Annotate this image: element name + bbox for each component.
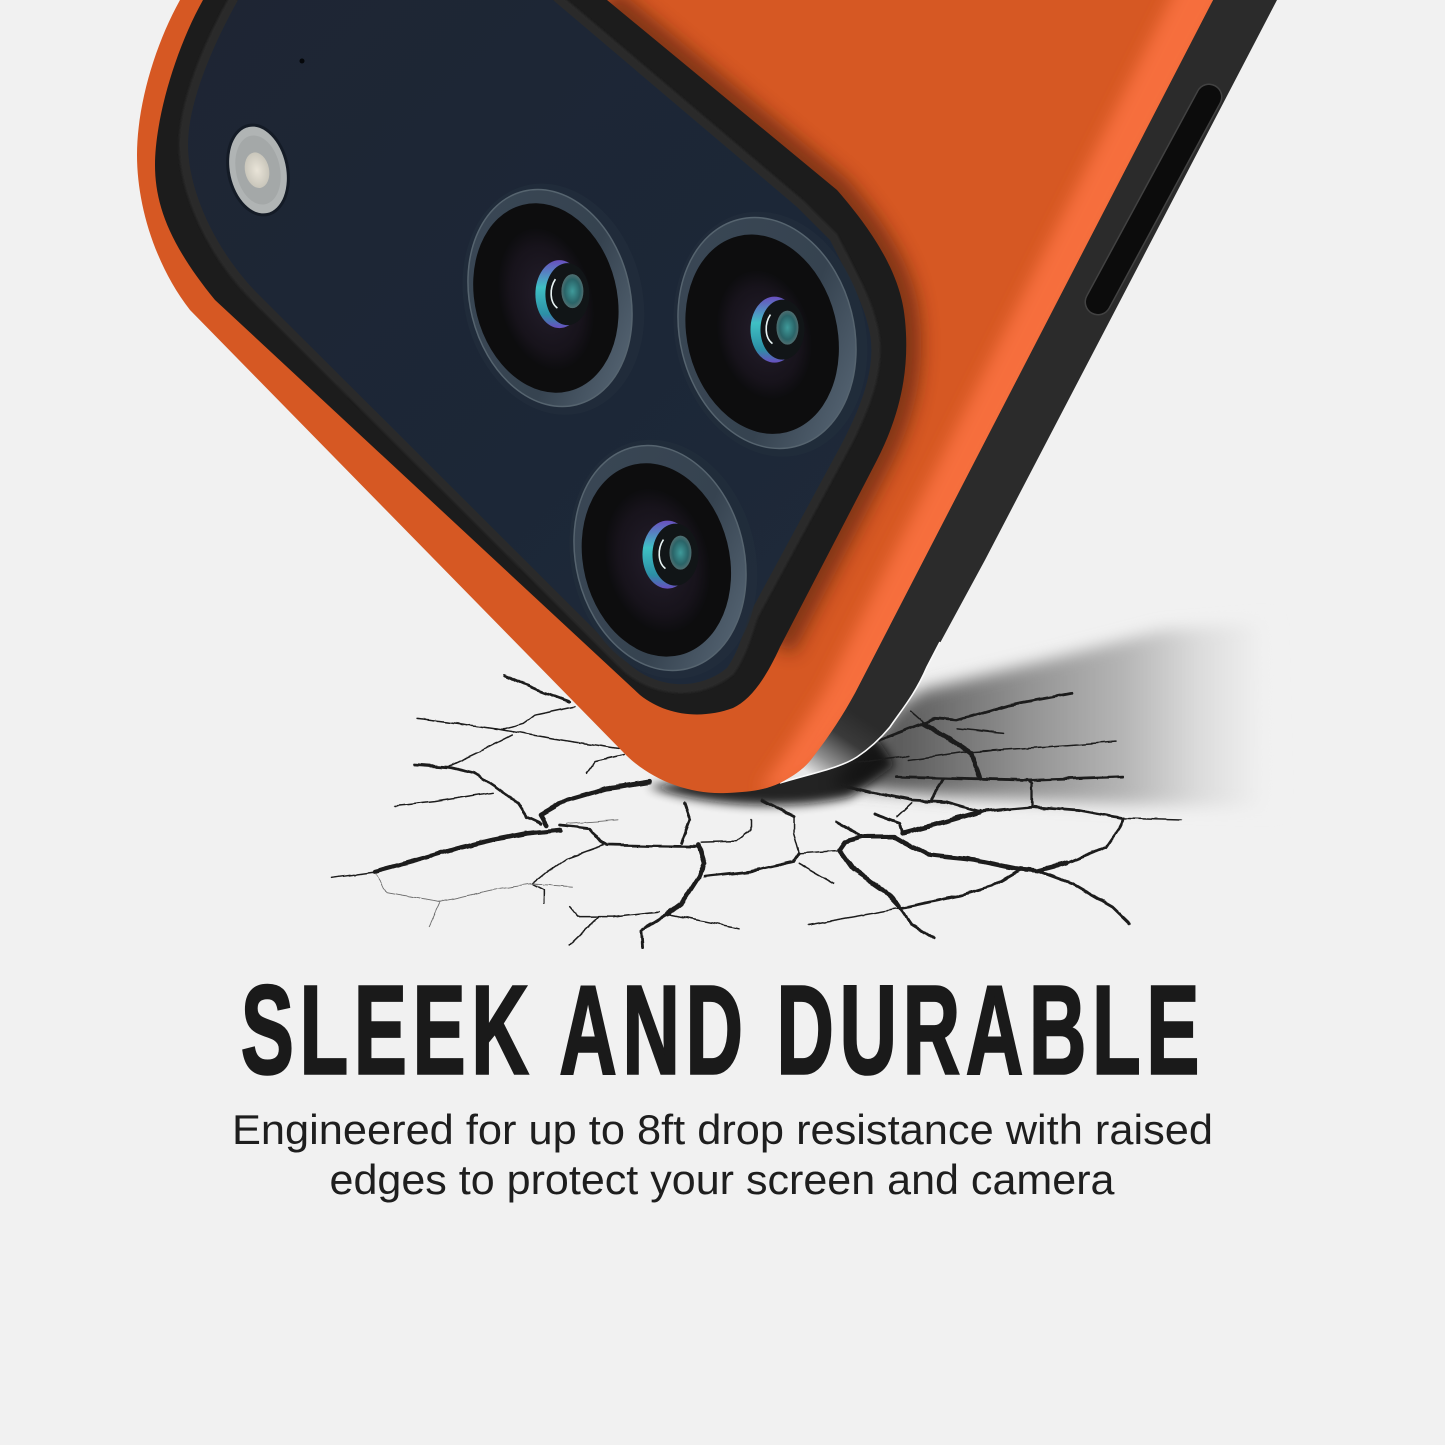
orange case body xyxy=(137,0,1213,793)
bumper ridge around plate xyxy=(188,0,871,684)
camera lens 2 xyxy=(648,191,893,478)
camera lens 1 xyxy=(439,164,668,434)
orange rim highlight xyxy=(607,0,1235,790)
description: Engineered for up to 8ft drop resistance with raised xyxy=(232,1106,1213,1153)
camera lens 3 xyxy=(545,420,782,699)
black side of phone xyxy=(727,0,1277,793)
thick cracks xyxy=(375,723,1066,914)
thin cracks xyxy=(331,707,1181,945)
navy camera plate xyxy=(188,0,871,684)
phone case xyxy=(137,0,1277,793)
bottom edge highlight xyxy=(780,642,940,783)
description xyxy=(232,1106,1213,1203)
microphone xyxy=(300,58,304,64)
cast shadow of phone xyxy=(648,622,1275,808)
title: SLEEK AND DURABLE xyxy=(241,961,1205,1101)
black bumper xyxy=(155,0,906,714)
side button xyxy=(1098,97,1209,302)
description: edges to protect your screen and camera xyxy=(330,1156,1115,1203)
cracked ground xyxy=(331,675,1181,947)
medium cracks xyxy=(415,675,1129,947)
flash xyxy=(218,118,298,222)
side gradient fading to light xyxy=(755,690,905,785)
